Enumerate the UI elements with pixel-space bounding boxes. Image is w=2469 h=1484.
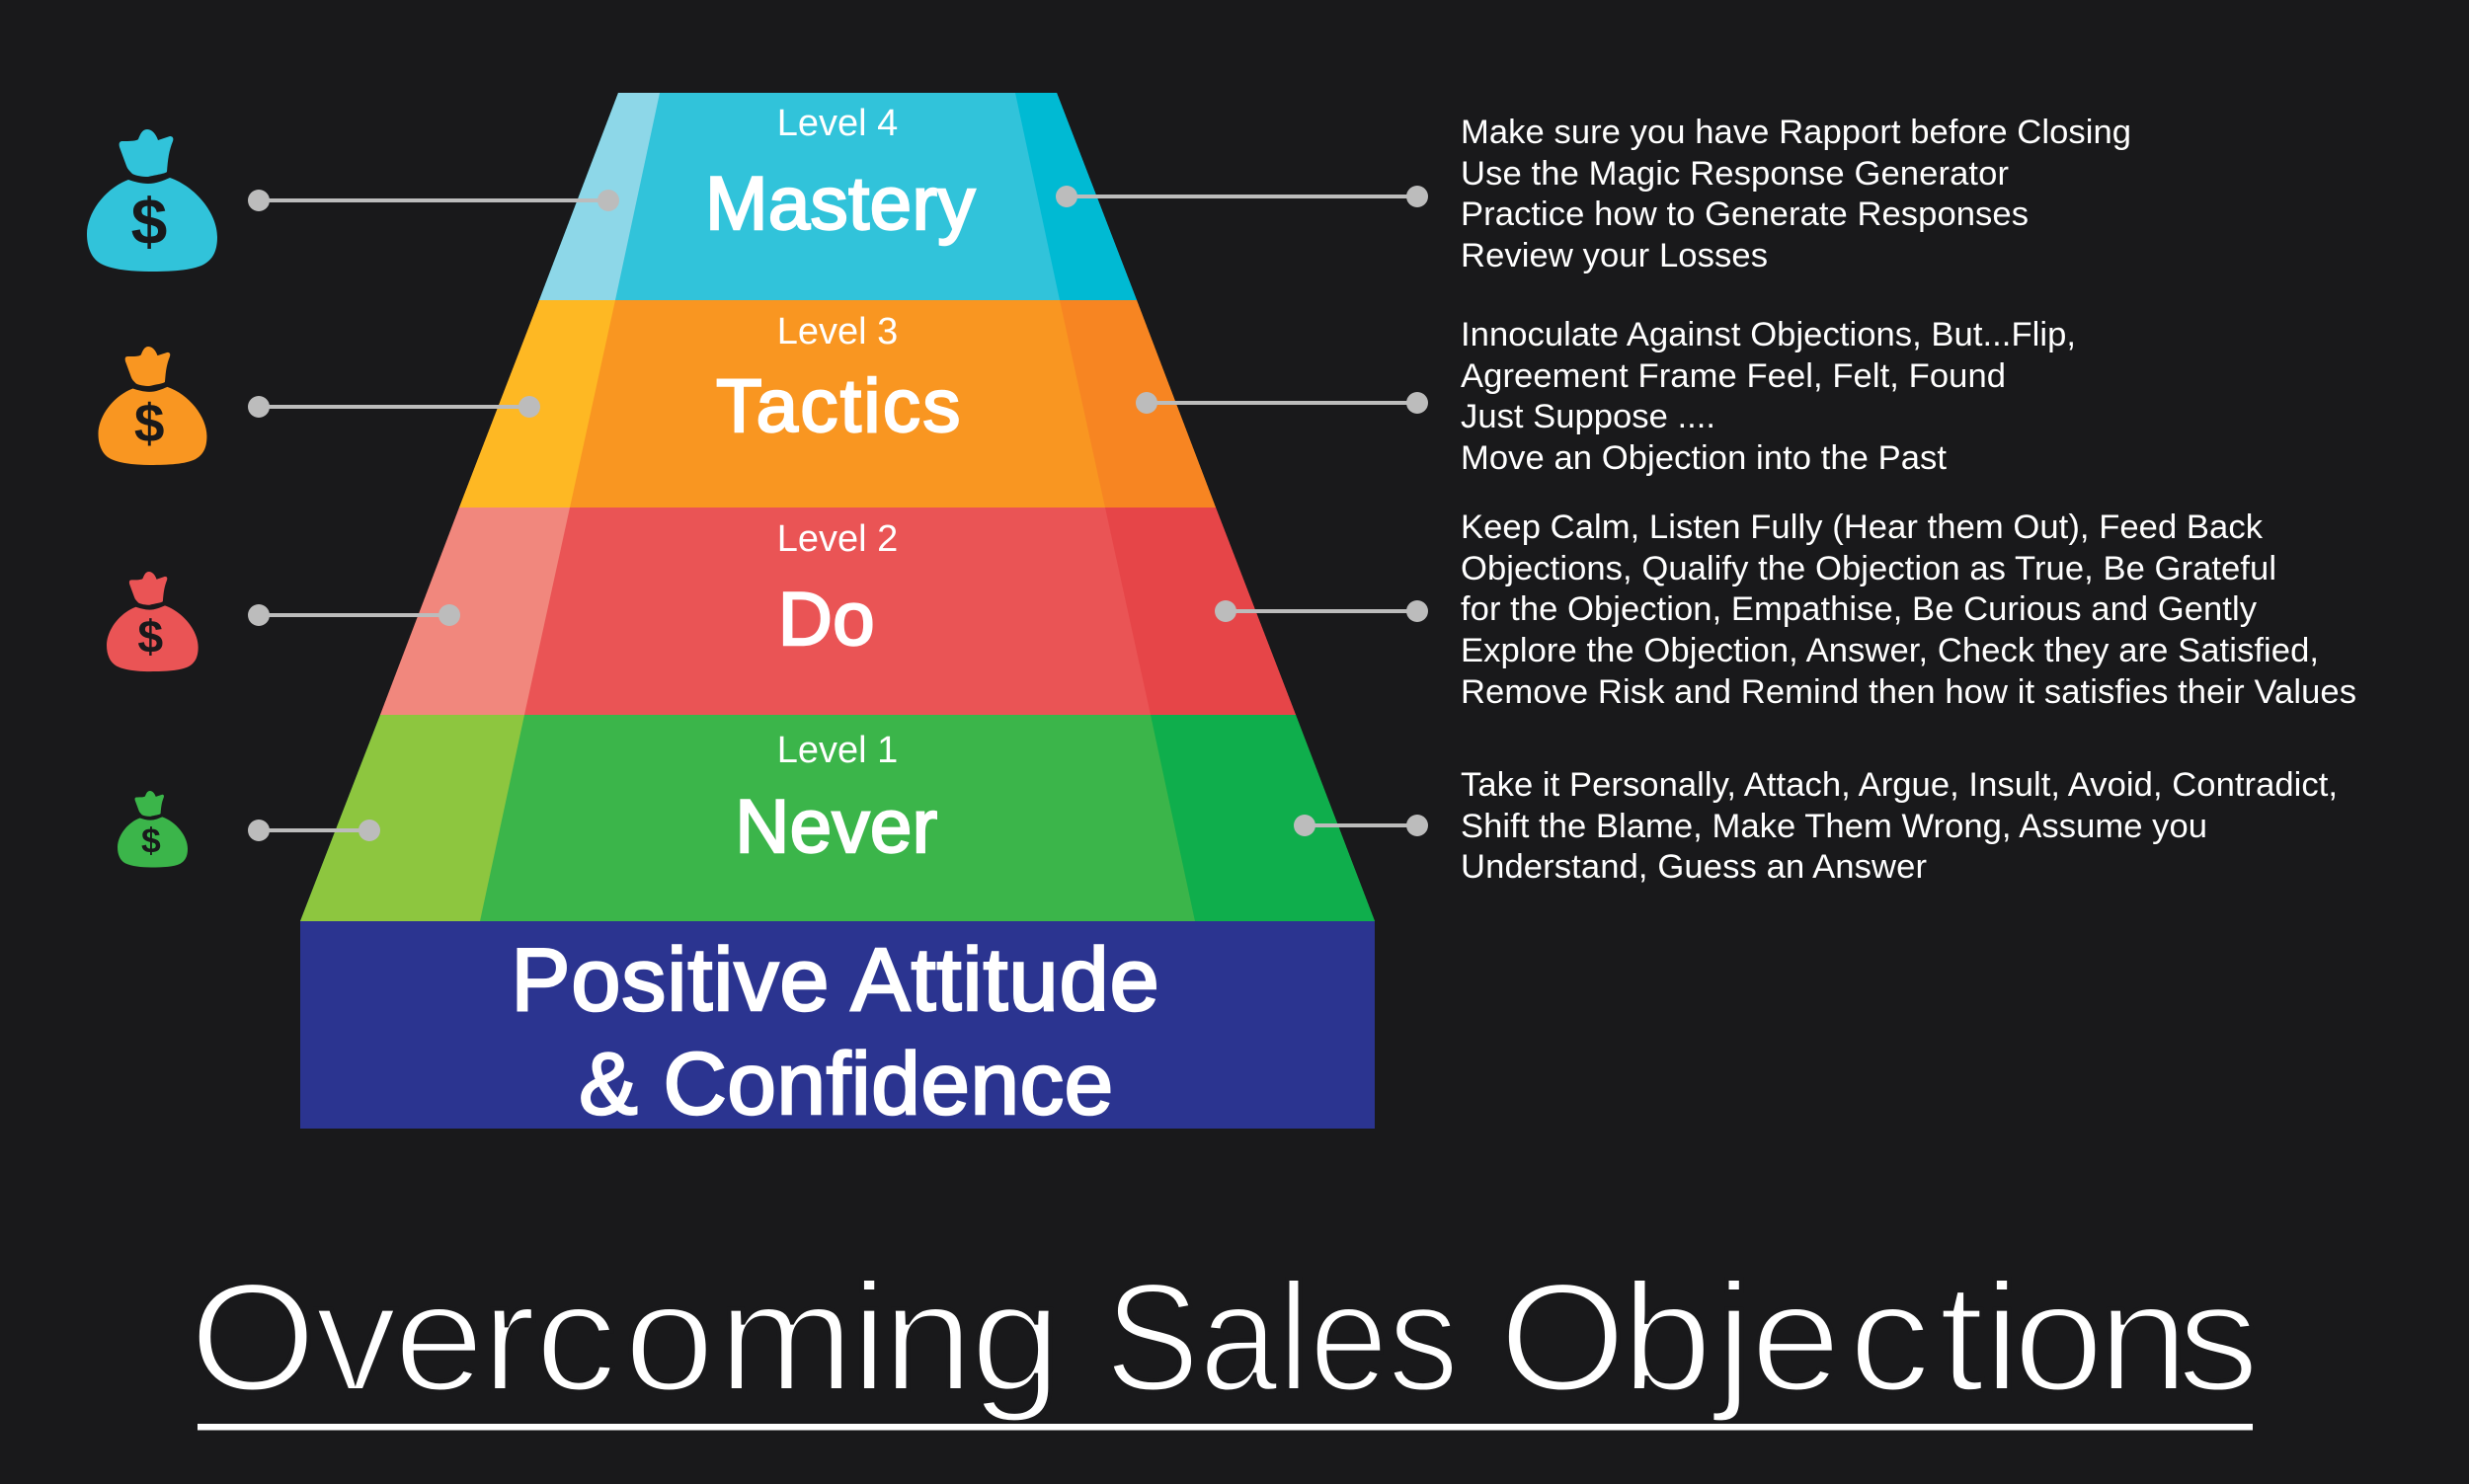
tier: Do level 2 <box>380 508 1296 715</box>
icon: money bag orange <box>99 347 206 465</box>
icon: money bag red: $ <box>137 610 163 662</box>
tier: Tactics level 3 <box>459 300 1216 508</box>
text block: Do actions: Explore the Objection, Answer, Check they are Satisfied, <box>1461 632 2319 669</box>
title underline <box>198 1424 2253 1430</box>
text block: Mastery actions: Review your Losses <box>1461 237 1768 274</box>
tier: Never level 1 <box>300 715 1375 921</box>
tier: Mastery level 4: Level 4 <box>777 103 898 144</box>
icon: money bag teal: $ <box>131 185 167 258</box>
text block: Mastery actions: Make sure you have Rapport before Closing <box>1461 114 2131 151</box>
pyramid <box>300 93 1375 1133</box>
text block: Tactics actions: Move an Objection into the Past <box>1461 439 1947 477</box>
text block: Never actions: Take it Personally, Attach, Argue, Insult, Avoid, Contradict, <box>1461 766 2338 804</box>
text block: Tactics actions: Innoculate Against Objections, But...Flip, <box>1461 316 2076 353</box>
connector: right Tactics <box>1136 392 1428 414</box>
tier: Never level 1: Never <box>735 785 938 869</box>
connector: right Never <box>1294 815 1428 836</box>
text block: Mastery actions <box>1461 114 2131 274</box>
title <box>190 1251 2259 1424</box>
text block: Mastery actions: Practice how to Generate Responses <box>1461 195 2029 233</box>
text block: Mastery actions: Use the Magic Response Generator <box>1461 155 2009 193</box>
title: Sales <box>1105 1252 1459 1424</box>
base: Positive Attitude and Confidence <box>300 921 1375 1133</box>
text block: Never actions: Shift the Blame, Make Them Wrong, Assume you <box>1461 808 2207 845</box>
icon: money bag teal <box>87 129 217 272</box>
connector: right Do <box>1215 600 1428 622</box>
title: Overcoming <box>190 1251 1062 1424</box>
tier: Tactics level 3: Level 3 <box>777 311 898 352</box>
connector: left Do <box>248 604 460 626</box>
base: Positive Attitude and Confidence: & Confidence <box>579 1034 1114 1133</box>
icon: money bag green: $ <box>141 820 161 860</box>
connector: left Never <box>248 820 380 841</box>
title: Objections <box>1499 1251 2259 1424</box>
tier: Mastery level 4: Mastery <box>705 162 976 246</box>
tier: Mastery level 4 <box>539 93 1137 300</box>
tier: Do level 2: Do <box>778 578 875 662</box>
text block: Do actions <box>1461 508 2356 711</box>
text block: Never actions <box>1461 766 2338 886</box>
connector: left Mastery <box>248 190 619 211</box>
text block: Tactics actions: Just Suppose .... <box>1461 398 1715 435</box>
icon: money bag red <box>107 572 199 671</box>
tier: Tactics level 3: Tactics <box>716 364 963 448</box>
icon: money bag green <box>118 791 188 867</box>
text block: Do actions: Keep Calm, Listen Fully (Hear them Out), Feed Back <box>1461 508 2264 546</box>
text block: Do actions: for the Objection, Empathise, Be Curious and Gently <box>1461 590 2258 628</box>
tier: Do level 2: Level 2 <box>777 518 898 560</box>
text block: Tactics actions: Agreement Frame Feel, Felt, Found <box>1461 357 2006 395</box>
connector: right Mastery <box>1056 186 1428 207</box>
icon: money bag orange: $ <box>134 393 164 454</box>
text block: Never actions: Understand, Guess an Answer <box>1461 848 1927 886</box>
connector: left Tactics <box>248 396 540 418</box>
base: Positive Attitude and Confidence: Positive Attitude <box>511 931 1160 1030</box>
tier: Never level 1: Level 1 <box>777 730 898 771</box>
text block: Do actions: Objections, Qualify the Objection as True, Be Grateful <box>1461 550 2276 587</box>
text block: Do actions: Remove Risk and Remind then how it satisfies their Values <box>1461 673 2356 711</box>
text block: Tactics actions <box>1461 316 2076 477</box>
